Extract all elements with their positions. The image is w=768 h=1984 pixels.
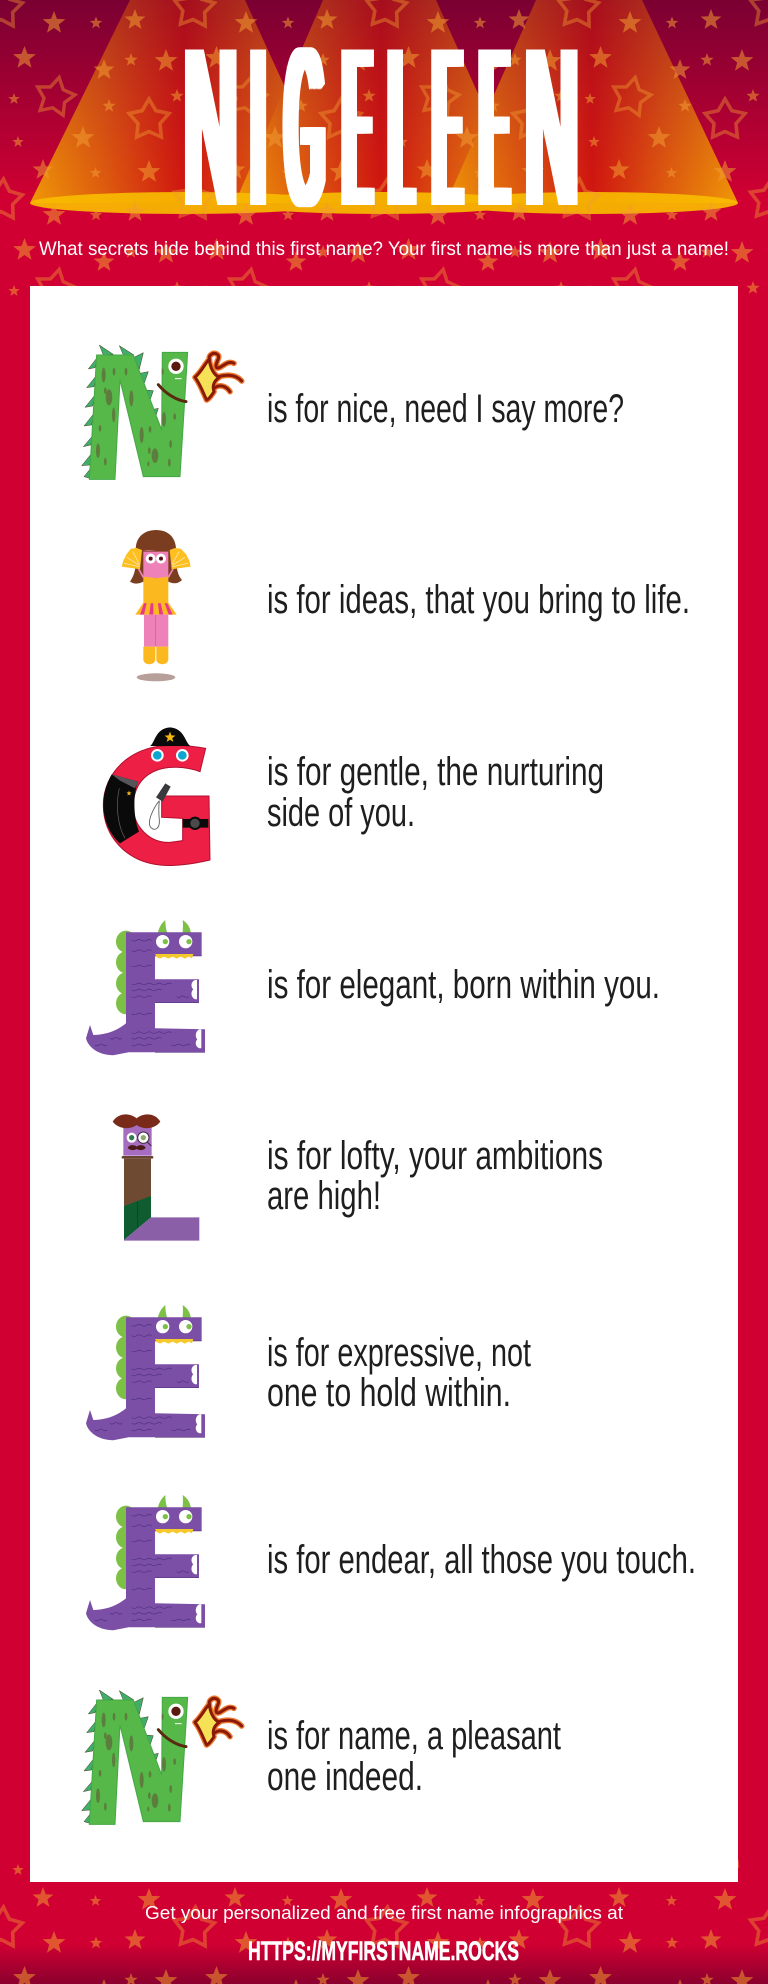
icon: green dragon letter N — [82, 345, 242, 479]
text: E lines: is for expressive, not — [267, 1331, 531, 1375]
title: I — [242, 0, 266, 253]
text: E lines: one to hold within. — [267, 1371, 511, 1415]
text: G lines: side of you. — [267, 791, 415, 835]
row: N name — [82, 1690, 561, 1824]
icon: detective letter L — [113, 1114, 199, 1241]
star pattern: footer — [0, 1860, 768, 1984]
text: N lines: is for name, a pleasant — [267, 1714, 561, 1758]
spotlights — [30, 0, 738, 214]
text: N lines: one indeed. — [267, 1755, 423, 1799]
title: N — [520, 0, 572, 253]
title: E — [428, 0, 454, 253]
text: L lines: are high! — [267, 1174, 381, 1218]
icon: purple monster letter E — [86, 920, 205, 1055]
title: N — [178, 0, 231, 253]
panel: letters — [30, 286, 738, 1882]
subtitle: What secrets hide behind this first name? Your first name is more than just a name! — [39, 238, 729, 260]
title: G — [280, 0, 317, 253]
row: N — [82, 345, 624, 479]
icon: police letter G — [103, 727, 210, 865]
title: E — [338, 0, 364, 253]
icon: purple monster letter E — [86, 1305, 205, 1440]
star pattern: header — [0, 0, 768, 300]
row: G — [103, 727, 604, 865]
row: E expressive — [86, 1305, 531, 1440]
row: E endear — [86, 1495, 696, 1630]
text: N line: is for nice, need I say more? — [267, 387, 624, 431]
title: E — [475, 0, 501, 253]
row: E elegant — [86, 920, 660, 1055]
icon: green dragon letter N — [82, 1690, 242, 1824]
title: L — [384, 0, 406, 253]
title — [178, 0, 578, 253]
row: L — [113, 1114, 603, 1241]
icon: purple monster letter E — [86, 1495, 205, 1630]
text: L lines: is for lofty, your ambitions — [267, 1134, 603, 1178]
icon: cheerleader letter I — [122, 530, 191, 681]
footer url: HTTPS://MYFIRSTNAME.ROCKS — [248, 1936, 519, 1966]
text: G lines: is for gentle, the nurturing — [267, 750, 604, 794]
footer text: Get your personalized and free first name infographics at — [145, 1902, 623, 1923]
row: I — [122, 530, 690, 681]
